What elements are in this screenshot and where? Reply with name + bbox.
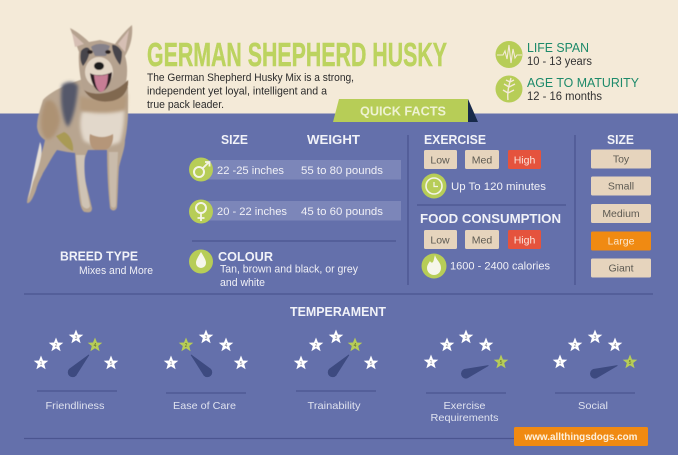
intro text: true pack leader. (147, 99, 224, 111)
gauge: exercise requirements: 2 (446, 343, 449, 349)
size scale: SIZE (607, 132, 634, 147)
size scale: Toy (613, 154, 630, 166)
row: male size and weight: 22 -25 inches (217, 165, 285, 177)
gauge: exercise requirements: 3 (465, 335, 468, 341)
gauge: trainability: 3 (335, 335, 338, 341)
life span text: LIFE SPAN (527, 40, 589, 55)
exercise levels: Med (472, 154, 492, 166)
banner: quick facts (333, 99, 478, 122)
exercise levels: Low (430, 154, 450, 166)
intro text: independent yet loyal, intelligent and a (147, 86, 327, 98)
gauge: friendliness: 1 (40, 361, 43, 367)
row: female size and weight (189, 200, 401, 224)
row: female size and weight: 20 - 22 inches (217, 206, 287, 218)
age to maturity text: AGE TO MATURITY (527, 75, 639, 90)
banner: quick facts: QUICK FACTS (360, 104, 446, 118)
age to maturity text (527, 75, 639, 103)
food consumption heading: FOOD CONSUMPTION (420, 211, 561, 226)
size scale: Medium (602, 208, 640, 220)
row: male size and weight (189, 158, 401, 182)
calories with flame icon: 1600 - 2400 calories (450, 260, 550, 272)
size and weight headings: WEIGHT (307, 132, 360, 147)
website badge (514, 427, 648, 446)
gauge: friendliness: 4 (94, 343, 97, 349)
food levels: Med (472, 234, 492, 246)
calories with flame icon (422, 254, 550, 278)
colour: and white (220, 277, 265, 289)
intro text: The German Shepherd Husky Mix is a strong, (147, 72, 354, 84)
gauge: ease of care: 3 (205, 335, 208, 341)
gauge: friendliness: 3 (75, 335, 78, 341)
gauge: friendliness: Friendliness (46, 400, 104, 412)
gauge: ease of care (164, 330, 248, 412)
gauge: social: 2 (574, 343, 577, 349)
gauge: ease of care: Ease of Care (173, 400, 236, 412)
background: cream header (0, 0, 678, 114)
gauge: friendliness: 2 (55, 343, 58, 349)
intro text (147, 72, 354, 111)
gauge: trainability: 2 (315, 343, 318, 349)
food levels (424, 230, 541, 249)
gauge: trainability: 5 (370, 361, 373, 367)
photo: German Shepherd Husky dog (27, 25, 132, 212)
size scale: Large (608, 236, 635, 248)
gauge: exercise requirements: Requirements (430, 412, 498, 424)
life span text (527, 40, 592, 68)
gauge: social: 1 (559, 360, 562, 366)
size scale: Small (608, 180, 634, 192)
breed type: BREED TYPE (60, 248, 138, 264)
row: female size and weight: 45 to 60 pounds (301, 206, 384, 218)
gauge: social (553, 330, 637, 412)
background: blue body (0, 114, 678, 455)
gauge: friendliness (34, 330, 118, 412)
gauge: social: 3 (594, 335, 597, 341)
exercise duration with clock icon (422, 174, 547, 198)
colour: Tan, brown and black, or grey (220, 264, 358, 276)
colour: COLOUR (218, 249, 274, 264)
food levels: High (514, 234, 535, 246)
gauge: social: 4 (614, 343, 617, 349)
temperament heading: TEMPERAMENT (290, 305, 386, 319)
gauge: exercise requirements (424, 330, 508, 424)
gauge: exercise requirements: 1 (430, 360, 433, 366)
title: GERMAN SHEPHERD HUSKY (147, 36, 447, 73)
size and weight headings (221, 132, 360, 147)
gauge: exercise requirements: 5 (500, 360, 503, 366)
gauge: social: Social (578, 400, 608, 412)
icon: age to maturity (496, 76, 522, 102)
gauge: exercise requirements: Exercise (444, 400, 486, 412)
age to maturity text: 12 - 16 months (527, 91, 602, 103)
website badge: www.allthingsdogs.com (524, 431, 638, 443)
row: male size and weight: 55 to 80 pounds (301, 165, 384, 177)
gauge: ease of care: 1 (170, 361, 173, 367)
icon: life span (496, 41, 522, 68)
gauge: ease of care: 4 (225, 343, 228, 349)
gauge: ease of care: 5 (240, 361, 243, 367)
gauge: trainability: Trainability (308, 400, 361, 412)
gauge: trainability: 4 (354, 343, 357, 349)
exercise levels: High (514, 154, 535, 166)
gauge: trainability (294, 330, 378, 412)
food levels: Low (430, 234, 450, 246)
gauge: exercise requirements: 4 (485, 343, 488, 349)
size and weight headings: SIZE (221, 132, 248, 147)
gauge: friendliness: 5 (110, 361, 113, 367)
gauge: social: 5 (629, 360, 632, 366)
gauge: ease of care: 2 (185, 343, 188, 349)
life span text: 10 - 13 years (527, 56, 592, 68)
colour (189, 249, 358, 289)
exercise heading: EXERCISE (424, 132, 486, 147)
breed type: Mixes and More (79, 265, 153, 277)
size scale: Giant (608, 262, 634, 274)
size scale (591, 132, 651, 278)
exercise duration with clock icon: Up To 120 minutes (451, 181, 547, 193)
breed type (60, 248, 153, 277)
exercise levels (424, 150, 541, 169)
gauge: trainability: 1 (300, 361, 303, 367)
